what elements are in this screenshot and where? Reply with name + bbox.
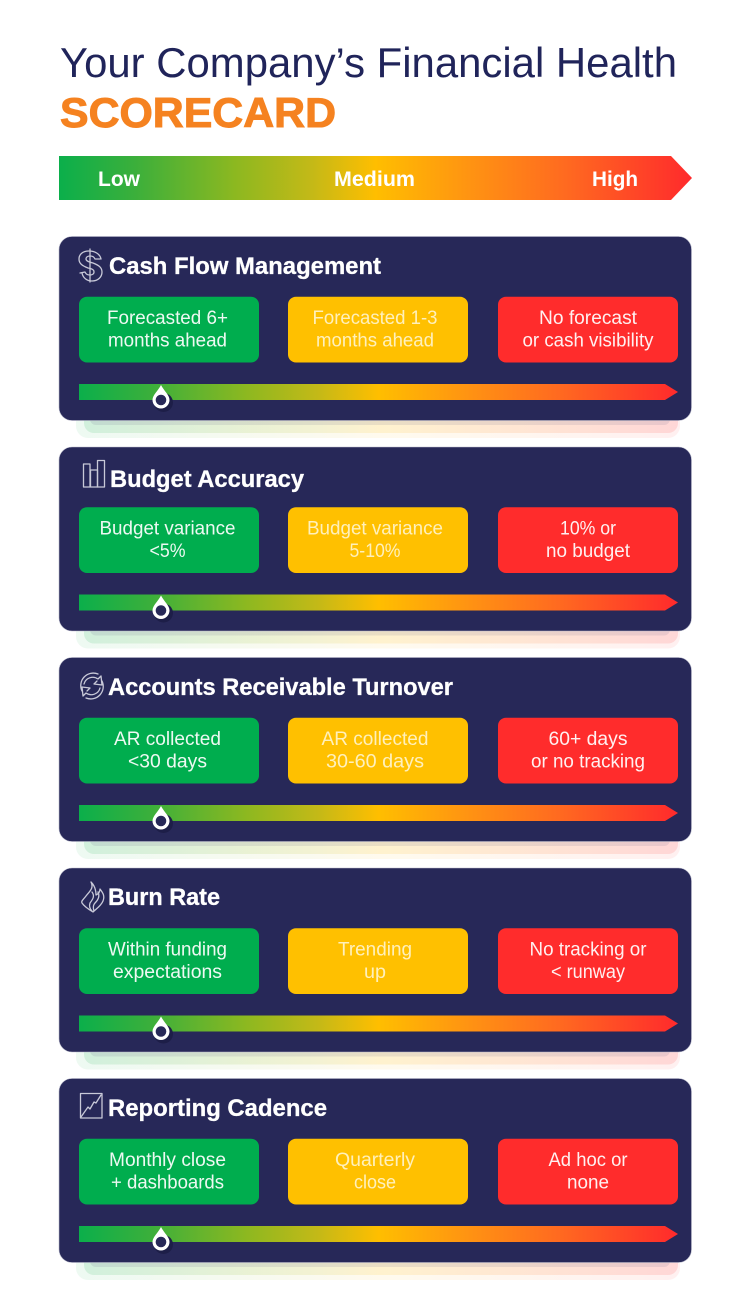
medium box: close xyxy=(354,1173,396,1194)
gauge marker xyxy=(152,385,173,412)
gauge marker xyxy=(152,1016,173,1044)
medium box: 30-60 days xyxy=(326,752,424,773)
good box: + dashboards xyxy=(111,1173,224,1194)
poor box xyxy=(498,507,678,573)
panel: budget accuracy xyxy=(59,447,692,648)
gauge bar xyxy=(79,1226,678,1242)
gauge bar xyxy=(79,1016,678,1032)
heading: Accounts Receivable Turnover xyxy=(108,674,453,701)
medium box: up xyxy=(364,962,386,983)
medium box xyxy=(288,297,468,362)
poor box: No tracking or xyxy=(530,940,647,960)
medium box: Trending xyxy=(338,940,412,960)
medium box xyxy=(288,1139,468,1204)
good box xyxy=(79,928,259,994)
panel: accounts receivable turnover xyxy=(59,658,692,859)
gauge marker xyxy=(152,1227,173,1254)
poor box: or no tracking xyxy=(531,752,645,773)
good box xyxy=(79,1139,259,1204)
poor box xyxy=(498,297,678,362)
panel: cash flow management xyxy=(59,236,692,438)
heading: Reporting Cadence xyxy=(108,1095,327,1122)
good box: <30 days xyxy=(128,752,207,773)
heading: Burn Rate xyxy=(108,884,220,911)
medium box: Forecasted 1-3 xyxy=(312,308,438,329)
gauge marker xyxy=(152,596,173,622)
medium box: 5-10% xyxy=(350,541,401,562)
good box: <5% xyxy=(150,541,186,562)
good box: Monthly close xyxy=(109,1150,226,1171)
gauge marker xyxy=(152,806,173,833)
good box: expectations xyxy=(113,962,222,983)
medium box: Quarterly xyxy=(335,1150,416,1171)
medium box xyxy=(288,507,468,573)
good box: AR collected xyxy=(114,729,221,750)
medium box: months ahead xyxy=(316,331,434,352)
icon: cycle arrows xyxy=(81,673,103,699)
good box: Budget variance xyxy=(100,518,236,540)
poor box: no budget xyxy=(546,541,631,562)
gauge bar xyxy=(79,594,678,610)
panel: reporting cadence xyxy=(59,1078,692,1280)
medium box: Budget variance xyxy=(307,518,443,540)
scale label: high: High xyxy=(592,168,638,191)
panel: burn rate xyxy=(59,868,692,1070)
poor box xyxy=(498,928,678,994)
good box xyxy=(79,297,259,362)
good box: Forecasted 6+ xyxy=(107,308,228,329)
poor box xyxy=(498,1139,678,1204)
gauge bar xyxy=(79,384,678,400)
heading: Cash Flow Management xyxy=(109,253,381,280)
good box: Within funding xyxy=(108,940,227,960)
scale arrow: low to high xyxy=(59,156,692,200)
good box xyxy=(79,507,259,573)
poor box: 60+ days xyxy=(548,729,628,750)
poor box xyxy=(498,718,678,784)
poor box: No forecast xyxy=(539,308,638,329)
poor box: 10% or xyxy=(560,518,617,540)
scale label: low: Low xyxy=(98,168,141,191)
poor box: or cash visibility xyxy=(522,331,654,352)
icon: bars xyxy=(84,460,104,487)
heading: Budget Accuracy xyxy=(110,466,305,493)
gauge bar xyxy=(79,805,678,821)
good box xyxy=(79,718,259,784)
poor box: < runway xyxy=(551,962,625,983)
poor box: none xyxy=(567,1173,609,1194)
title: Your Company’s Financial Health xyxy=(60,39,677,86)
medium box xyxy=(288,718,468,784)
title: scorecard: SCORECARD xyxy=(60,89,336,136)
icon: dollar xyxy=(79,249,102,282)
scale label: medium: Medium xyxy=(334,168,415,191)
icon: flame xyxy=(82,882,104,912)
medium box: AR collected xyxy=(322,729,428,750)
medium box xyxy=(288,928,468,994)
poor box: Ad hoc or xyxy=(548,1150,628,1171)
icon: line chart xyxy=(80,1094,102,1118)
title xyxy=(60,39,677,136)
good box: months ahead xyxy=(108,331,227,352)
